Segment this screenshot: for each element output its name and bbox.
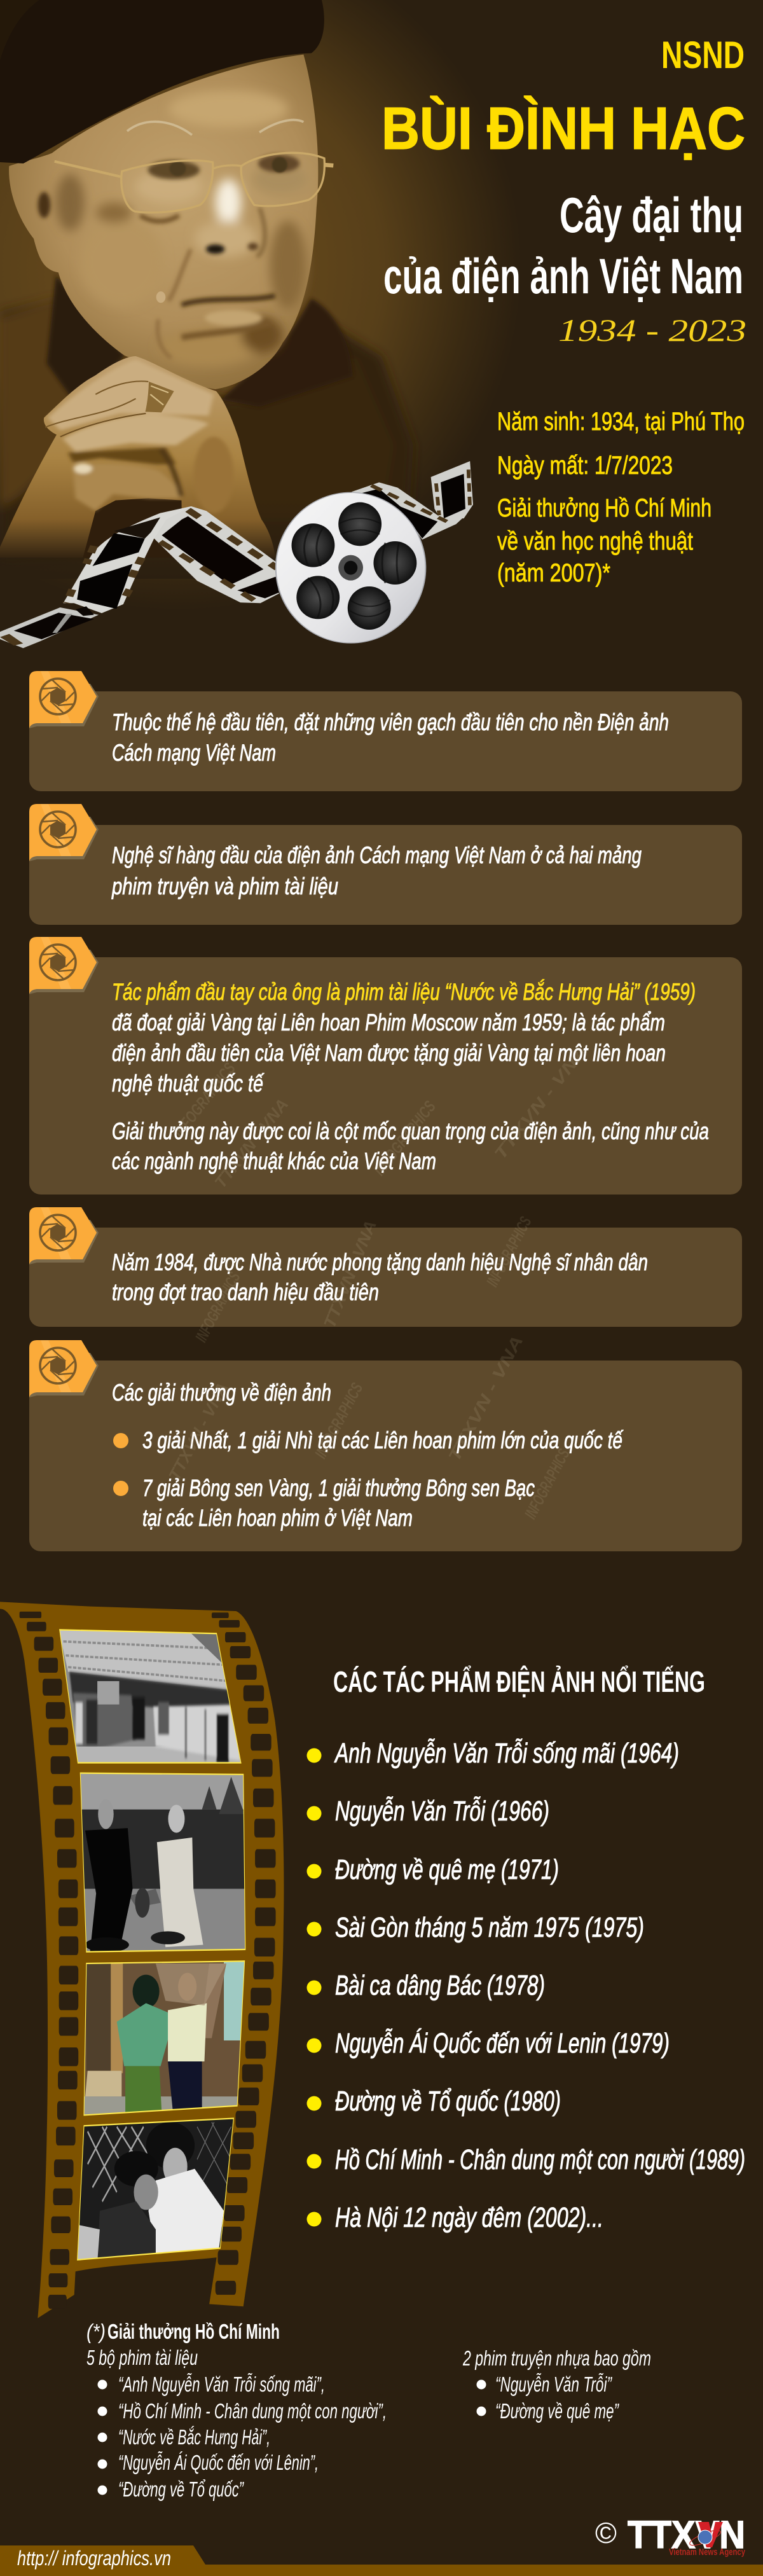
panel text: các ngành nghệ thuật khác của Việt Nam [112, 1148, 436, 1174]
watermarks: INFOGRAPHICS [483, 1213, 535, 1290]
award bullets [113, 1433, 128, 1496]
face [9, 55, 318, 389]
panel: first generation [29, 671, 742, 791]
reel [276, 492, 425, 643]
photo: embracing couple [76, 2117, 236, 2262]
panel: leading artist [29, 804, 742, 925]
gap between hands [83, 498, 182, 558]
footnote: Ho Chi Minh Prize: “Anh Nguyễn Văn Trỗi sống mãi”, [118, 2372, 325, 2396]
collar [46, 275, 125, 407]
film strip rising [63, 506, 207, 616]
facts block: Ngày mất: 1/7/2023 [497, 452, 673, 480]
glasses [55, 153, 333, 212]
list: film works: Đường về quê mẹ (1971) [335, 1854, 559, 1885]
photo: two women on bridge [83, 1959, 248, 2117]
film strip descending [154, 506, 279, 603]
eyes [169, 162, 186, 176]
logo V and globe [698, 2522, 723, 2547]
list: film works: Hà Nội 12 ngày đêm (2002)... [335, 2202, 603, 2233]
panel text: tại các Liên hoan phim ở Việt Nam [142, 1505, 413, 1531]
watermarks: INFOGRAPHICS [191, 1268, 244, 1345]
panel text [112, 1009, 709, 1174]
list: film works: Sài Gòn tháng 5 năm 1975 (1975) [335, 1912, 644, 1943]
footnote: Ho Chi Minh Prize: “Nguyễn Văn Trỗi” [495, 2372, 612, 2396]
footnote: Ho Chi Minh Prize: 2 phim truyện nhựa bao gồm [462, 2346, 651, 2370]
film reel and strip [0, 461, 473, 648]
film strip with photos [0, 1602, 284, 2318]
copyright and TTXVN logo: TTXVN [628, 2513, 745, 2556]
title block [382, 34, 746, 348]
ring [146, 382, 174, 412]
list: film works: Nguyễn Văn Trỗi (1966) [335, 1796, 549, 1827]
watermarks: INFOGRAPHICS [521, 1445, 574, 1522]
panel: film awards [29, 1340, 742, 1551]
icon: aperture tag [29, 937, 99, 994]
panel text: trong đợt trao danh hiệu đầu tiên [112, 1279, 379, 1305]
panel text [112, 709, 669, 766]
panel text: Các giải thưởng về điện ảnh [112, 1380, 331, 1406]
portrait photo [0, 0, 521, 611]
photo: two men walking [78, 1772, 248, 1954]
icon: aperture tag [29, 804, 99, 861]
panel text: nghệ thuật quốc tế [112, 1070, 265, 1097]
panel: first work [29, 937, 742, 1195]
footnote: Ho Chi Minh Prize: 5 bộ phim tài liệu [86, 2346, 198, 2369]
facts block: (năm 2007)* [497, 559, 610, 587]
footnote: Ho Chi Minh Prize: “Đường về quê mẹ” [495, 2399, 619, 2423]
list: film works [306, 1738, 745, 2233]
panel text: 7 giải Bông sen Vàng, 1 giải thưởng Bông sen Bạc [142, 1475, 535, 1501]
watermarks: TTXVN - VNA [444, 1332, 527, 1465]
panel text [112, 1380, 624, 1531]
panel text: Cách mạng Việt Nam [112, 740, 276, 766]
watermarks: INFOGRAPHICS [311, 1380, 367, 1462]
footnote: Ho Chi Minh Prize: “Đường về Tổ quốc” [118, 2477, 244, 2501]
years: 1934 - 2023 [558, 312, 746, 348]
face group [0, 0, 353, 407]
watermarks [165, 1041, 591, 1522]
watermarks: TTXVN - VNA [490, 1041, 591, 1163]
list: film works: Đường về Tổ quốc (1980) [335, 2086, 561, 2117]
film strip right [352, 461, 473, 539]
panel text [112, 1249, 648, 1305]
beret [0, 0, 324, 163]
eyebrows [127, 120, 303, 135]
watermarks: INFOGRAPHICS [169, 1059, 239, 1141]
footnote: Ho Chi Minh Prize: (*) [86, 2320, 106, 2343]
facts block [497, 408, 745, 587]
film strip tail [0, 607, 99, 648]
panel text: phim truyện và phim tài liệu [111, 873, 338, 899]
watermarks: TTXVN - VNA [210, 1095, 292, 1192]
list: film works: Bài ca dâng Bác (1978) [335, 1970, 545, 2001]
strip body [0, 1602, 284, 2318]
copyright and TTXVN logo: © [595, 2516, 617, 2549]
icon: aperture tag [29, 1207, 99, 1264]
footnote: Ho Chi Minh Prize: Giải thưởng Hồ Chí Minh [107, 2320, 280, 2343]
photo: thatched hut [58, 1628, 244, 1768]
footer bar with website [0, 2545, 763, 2576]
footnote: Ho Chi Minh Prize [86, 2320, 651, 2501]
footnote: Ho Chi Minh Prize: “Nguyễn Ái Quốc đến với Lênin”, [118, 2451, 319, 2474]
footer bar with website: http:// infographics.vn [17, 2547, 171, 2570]
panel text [111, 842, 642, 899]
footnote: Ho Chi Minh Prize: “Hồ Chí Minh - Chân dung một con người”, [118, 2399, 387, 2423]
watermarks: INFOGRAPHICS [369, 1097, 439, 1179]
watermarks: TTXVN - VNA [165, 1380, 232, 1484]
watermarks: TTXVN - VNA [320, 1217, 380, 1331]
footnote: Ho Chi Minh Prize: “Nước về Bắc Hưng Hải”, [118, 2425, 270, 2449]
sprocket holes [20, 1612, 276, 2309]
facts block: về văn học nghệ thuật [497, 527, 693, 555]
icon: aperture tag [29, 1340, 99, 1397]
panel: 1984 title [29, 1207, 742, 1327]
clasped hands [0, 356, 275, 558]
panel text: 3 giải Nhất, 1 giải Nhì tại các Liên hoan phim lớn của quốc tế [142, 1427, 624, 1453]
mole [156, 291, 165, 303]
icon: aperture tag [29, 671, 99, 728]
sweater [0, 299, 413, 560]
